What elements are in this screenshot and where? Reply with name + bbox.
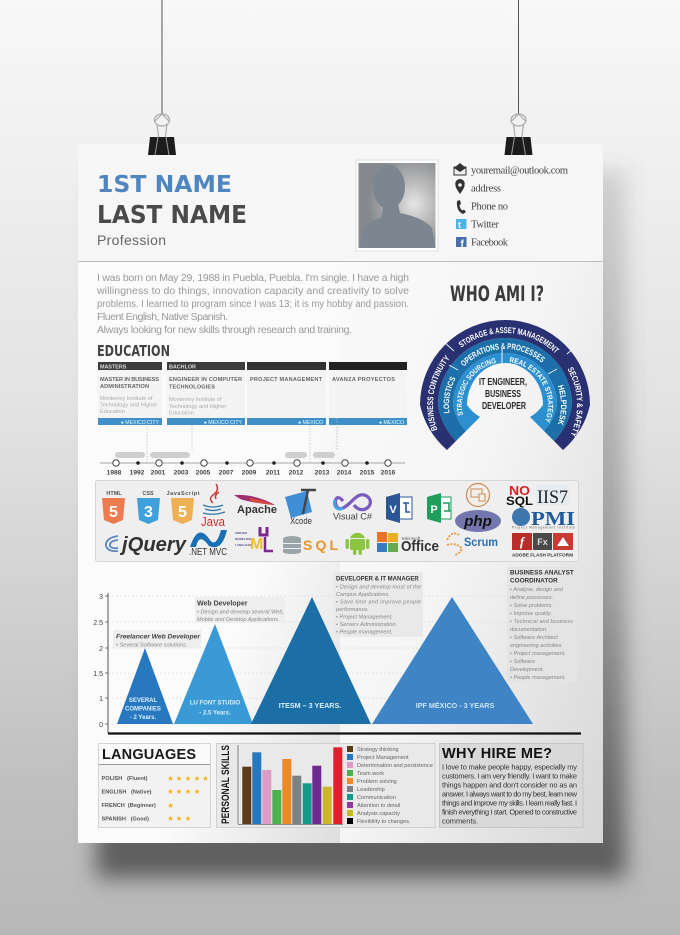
- icon: phone: [457, 200, 466, 214]
- logo: NoSQL: SQL: [506, 496, 533, 508]
- triangle: ipf mexico: IPF MÉXICO - 3 YEARS: [416, 701, 494, 710]
- card: bachelor: Education: [169, 410, 194, 416]
- language rows: SPANISH (Good): [102, 816, 149, 822]
- callout: developer and IT manager: • People management.: [336, 630, 393, 636]
- contact list: [454, 163, 568, 250]
- contact email: youremail@outlook.com: [471, 166, 568, 176]
- card: avanza proyectos: [329, 362, 407, 426]
- vertical heading: PERSONAL SKILLS: [220, 745, 232, 824]
- card: project management: [247, 362, 326, 426]
- card: masters: Technology and Higher: [100, 402, 157, 408]
- logo: Visio: [386, 493, 412, 523]
- logo: Microsoft Office: Microsoft: [402, 536, 421, 541]
- logo: NoSQL: NO: [509, 484, 530, 498]
- chart legend: Analysis capacity: [357, 811, 400, 817]
- biography text: problems. I learned to program since I was 13; it is my hobby and passion.: [97, 298, 409, 310]
- biography text: Fluent English, Native Spanish.: [97, 311, 228, 323]
- logo: UML: UNIFIED: [235, 531, 248, 535]
- heading: why hire me: WHY HIRE ME?: [442, 746, 552, 762]
- why hire me text: I love to make people happy, especially my: [442, 762, 577, 772]
- panel: languages: [98, 744, 210, 828]
- callout: web developer: • Design and develop several Web,: [197, 610, 284, 616]
- biography text: [96, 272, 409, 336]
- name heading: [97, 170, 247, 248]
- chart grid and axes: 1: [99, 696, 103, 703]
- logo: Visual C#: [333, 495, 373, 522]
- right hanging string and clip: [504, 0, 532, 155]
- callout: business analyst coordinator: define processes.: [510, 595, 553, 601]
- chart grid and axes: 2: [99, 646, 103, 653]
- why hire me text: answer. I always want to do my best, learn new: [442, 790, 578, 798]
- language star ratings: ★: [167, 774, 174, 783]
- timeline years: 1988: [107, 470, 122, 476]
- timeline years: 2005: [196, 470, 211, 476]
- triangle: several companies: - 2 Years.: [130, 715, 156, 721]
- callout: web developer: [195, 597, 285, 623]
- card: masters: MASTER IN BUSINESS: [100, 377, 159, 383]
- logo: IIS7: IIS7: [537, 487, 568, 508]
- icon: facebook: f: [460, 239, 464, 250]
- logo: UML: MODELING: [235, 537, 252, 541]
- logo: CSS3: CSS: [142, 491, 154, 497]
- logo: Apache: Apache: [237, 504, 277, 516]
- logo: devices circle: [466, 484, 490, 506]
- arc label: logistics: LOGISTICS: [444, 376, 456, 414]
- language star ratings: ★: [185, 814, 192, 823]
- logo: php: [455, 510, 501, 532]
- logo: .NET MVC: .NET MVC: [189, 547, 227, 558]
- language star ratings: [167, 774, 209, 823]
- logo: Project: P: [430, 504, 438, 516]
- logo: UML: M: [250, 536, 263, 553]
- card: bachelor: BACHLOR: [169, 364, 196, 370]
- timeline years: 2009: [242, 470, 257, 476]
- callout: freelancer web developer: [113, 630, 201, 648]
- heading: who am I: WHO AMI I?: [450, 282, 544, 306]
- arc label: business continuity: BUSINESS CONTINUITY: [427, 354, 449, 432]
- timeline years: 2007: [219, 470, 234, 476]
- why hire me text: finish everything I start. Opened to constructive: [442, 808, 577, 816]
- language star ratings: ★: [167, 814, 174, 823]
- logo: PMI: PMI: [531, 508, 575, 530]
- logo: Adobe Flash Platform: ADOBE FLASH PLATFORM: [512, 552, 573, 558]
- callout: business analyst coordinator: • Improve quality.: [510, 611, 552, 617]
- callout: developer and IT manager: • Design and develop most of the: [336, 584, 421, 590]
- logo: PMI: Project Management Institute: [512, 526, 575, 530]
- biography text: Always looking for new skills through research and training.: [97, 324, 352, 336]
- timeline years: 1992: [130, 470, 145, 476]
- logo: HTML5: HTML: [106, 491, 122, 497]
- icon: location pin: [455, 179, 465, 194]
- language star ratings: ★: [176, 787, 183, 796]
- card: masters: ● MEXICO CITY: [121, 420, 160, 426]
- card: masters: Monterrey Institute of: [100, 396, 153, 402]
- language star ratings: ★: [202, 774, 209, 783]
- chart legend: Leadership: [357, 787, 385, 793]
- card: bachelor: ● MEXICO CITY: [204, 420, 243, 426]
- logo: php: php: [463, 513, 492, 530]
- why hire me text: customers. I am very friendly. I want to make: [442, 772, 577, 780]
- name heading: LAST NAME: [97, 200, 247, 229]
- contact address: address: [471, 184, 501, 194]
- callout: freelancer web developer: • Several Software solutions.: [116, 642, 187, 648]
- radial skills diagram: [420, 320, 590, 450]
- timeline years: 2016: [381, 470, 396, 476]
- callout: business analyst coordinator: • Technical and business: [510, 619, 573, 625]
- biography text: I was born on May 29, 1988 in Puebla, Puebla. I'm single. I have a high: [97, 272, 409, 284]
- logo: Xcode: Xcode: [290, 516, 312, 526]
- triangle: lu font studio: [174, 624, 253, 724]
- card: masters: MASTERS: [100, 364, 127, 370]
- triangle: several companies: COMPANIES: [125, 706, 161, 712]
- callout: business analyst coordinator: • Software Architect: [510, 635, 558, 641]
- callout: business analyst coordinator: COORDINATOR: [510, 578, 558, 584]
- card: project management: ● MEXICO: [298, 420, 323, 426]
- chart legend: [347, 746, 433, 825]
- arc label: real estate strategy: REAL ESTATE STRATEGY: [510, 357, 554, 423]
- name heading: 1ST NAME: [97, 170, 232, 198]
- callout: business analyst coordinator: • Analyse, design and: [510, 587, 564, 593]
- why hire me text: comments.: [442, 816, 478, 826]
- triangle: lu font studio: LU FONT STUDIO: [190, 700, 240, 706]
- card: masters: [98, 362, 162, 426]
- logo: PMI: [512, 508, 575, 530]
- callout: business analyst coordinator: BUSINESS ANALYST: [510, 570, 574, 576]
- card: bachelor: Monterrey Institute of: [169, 397, 222, 403]
- icon: email: [454, 163, 466, 175]
- logo: jQuery: jQuery: [119, 534, 187, 556]
- timeline period pills: [115, 452, 335, 458]
- chart legend: Determination and persistence: [357, 763, 433, 769]
- callout: business analyst coordinator: • Solve problems.: [510, 603, 553, 609]
- logo: Apache: [234, 495, 277, 516]
- card: avanza proyectos: AVANZA PROYECTOS: [332, 377, 395, 383]
- logo: Scrum: [447, 533, 498, 555]
- language star ratings: ★: [185, 774, 192, 783]
- logo: Scrum: Scrum: [464, 535, 498, 549]
- language star ratings: ★: [176, 774, 183, 783]
- chart grid and axes: 3: [99, 594, 103, 601]
- callout: developer and IT manager: • Project Management.: [336, 614, 393, 620]
- callout: developer and IT manager: DEVELOPER & IT MANAGER: [336, 576, 419, 582]
- timeline years: [107, 470, 396, 476]
- center label: IT ENGINEER,: [479, 377, 527, 388]
- chart legend: Flexibility to changes.: [357, 819, 411, 825]
- logo: Android: [346, 533, 369, 555]
- triangle: ipf mexico: [372, 597, 533, 724]
- card: bachelor: Technology and Higher: [169, 404, 226, 410]
- logo: HTML5: [102, 491, 125, 524]
- language star ratings: ★: [194, 774, 201, 783]
- logo: Microsoft Office: [377, 532, 439, 555]
- logo: Adobe Flash Platform: [512, 533, 573, 558]
- heading: education: EDUCATION: [97, 342, 170, 360]
- panel: personal skills: [216, 744, 435, 828]
- card: avanza proyectos: ● MEXICO: [379, 420, 404, 426]
- bar chart: [238, 745, 343, 824]
- callout: business analyst coordinator: documentation.: [510, 627, 548, 633]
- icon: twitter: t: [458, 220, 461, 230]
- callout: business analyst coordinator: • Software: [510, 659, 535, 665]
- timeline years: 2001: [151, 470, 166, 476]
- left hanging string and clip: [148, 0, 176, 155]
- profile photo: [356, 160, 438, 251]
- inner light band: [453, 353, 557, 431]
- callout: developer and IT manager: • Servers Administration.: [336, 622, 397, 628]
- arc label: operations and processes: OPERATIONS & PROCESSES: [461, 343, 545, 366]
- card: masters: ADMINISTRATION: [100, 384, 149, 390]
- card: bachelor: TECHNOLOGIES: [169, 384, 215, 390]
- triangle: several companies: SEVERAL: [129, 698, 158, 704]
- callout: developer and IT manager: [334, 572, 423, 637]
- logo: UML: LANGUAGE: [235, 543, 252, 547]
- chart grid and axes: [93, 593, 581, 734]
- experience chart: [93, 567, 581, 734]
- chart legend: Problem solving: [357, 779, 397, 785]
- arc label: security and safety: SECURITY & SAFETY: [568, 367, 583, 438]
- timeline years: 2014: [337, 470, 352, 476]
- logo: SQL database: SQL: [303, 537, 338, 553]
- technology logos panel: [96, 480, 578, 562]
- poster shadow: [96, 170, 626, 878]
- center label: [479, 377, 527, 412]
- education timeline: [100, 417, 405, 476]
- card: project management: PROJECT MANAGEMENT: [250, 377, 323, 383]
- callout: business analyst coordinator: Development.: [510, 667, 544, 673]
- logo: Java: Java: [201, 514, 226, 529]
- contact phone: Phone no: [471, 202, 508, 212]
- language star ratings: ★: [176, 814, 183, 823]
- logo: JavaScript: 5: [178, 504, 187, 521]
- callout: web developer: Mobile and Desktop Applications.: [197, 617, 280, 623]
- heading: languages: LANGUAGES: [102, 747, 196, 763]
- triangle: itesm: ITESM – 3 YEARS.: [279, 701, 341, 710]
- chart legend: Team work: [357, 771, 384, 777]
- timeline years: 2011: [266, 470, 280, 476]
- chart legend: Project Management: [357, 755, 409, 761]
- callout: developer and IT manager: • Save time and improve people: [336, 600, 421, 606]
- chart grid and axes: 1.5: [93, 671, 103, 678]
- card: bachelor: ENGINEER IN COMPUTER: [169, 377, 242, 383]
- contact twitter: Twitter: [471, 220, 500, 230]
- chart legend: Strategy thinking: [357, 747, 399, 753]
- logo: Visual C#: Visual C#: [333, 512, 373, 522]
- callout: business analyst coordinator: [507, 567, 577, 682]
- timeline years: 2013: [315, 470, 330, 476]
- card: bachelor: [167, 362, 245, 426]
- logo: Adobe Flash Platform: Fx: [537, 537, 548, 547]
- education cards: [98, 362, 407, 426]
- language rows: ENGLISH (Native): [102, 790, 152, 796]
- logo: Xcode: [285, 490, 316, 526]
- arc label: storage and asset management: STORAGE & ASSET MANAGEMENT: [458, 327, 560, 353]
- biography text: willingness to do things, innovation capacity and creativity to solve: [96, 285, 409, 297]
- middle blue band: [438, 338, 572, 441]
- callout: business analyst coordinator: • People management.: [510, 675, 566, 681]
- logo: Microsoft Office: Office: [401, 538, 439, 555]
- language star ratings: ★: [185, 787, 192, 796]
- callout: developer and IT manager: performance.: [335, 607, 369, 613]
- card: masters: Education: [100, 409, 125, 415]
- logo: .NET MVC: [189, 530, 227, 558]
- logo: UML: [235, 527, 273, 553]
- outer navy band: [420, 320, 590, 450]
- chart grid and axes: 2.5: [93, 620, 103, 627]
- logo: CSS3: [137, 491, 160, 524]
- logo: JavaScript: JavaScript: [166, 491, 200, 497]
- chart legend: Attention to detail: [357, 803, 400, 809]
- language star ratings: ★: [167, 787, 174, 796]
- language rows: [102, 776, 156, 822]
- callout: business analyst coordinator: engineering activities.: [510, 643, 563, 649]
- logo: Project: [427, 493, 451, 523]
- logo: HTML5: 5: [109, 504, 118, 521]
- poster sheet: [78, 144, 603, 843]
- language star ratings: ★: [194, 787, 201, 796]
- logo: CSS3: 3: [144, 504, 153, 521]
- arc label: helpdesk: HELPDESK: [558, 384, 567, 426]
- center label: BUSINESS: [485, 389, 521, 400]
- callout: web developer: Web Developer: [197, 600, 248, 608]
- callout: developer and IT manager: Campus Applications.: [336, 592, 390, 598]
- triangle: lu font studio: - 2.5 Years.: [199, 710, 231, 716]
- callout: freelancer web developer: Freelancer Web Developer: [116, 634, 200, 640]
- why hire me text: [442, 762, 578, 826]
- triangle: itesm: [251, 597, 371, 724]
- logo: JavaScript: [166, 491, 200, 524]
- logo: Visio: V: [389, 504, 397, 516]
- name heading: Profession: [97, 232, 166, 248]
- logo: Adobe Flash Platform: f: [520, 534, 526, 549]
- logo: NoSQL: [506, 484, 533, 508]
- timeline years: 2003: [174, 470, 189, 476]
- panel: why hire me: [440, 744, 583, 828]
- chart grid and axes: 0: [99, 722, 103, 729]
- chart legend: Communication: [357, 795, 396, 801]
- callout: business analyst coordinator: • Project management.: [510, 651, 566, 657]
- language rows: FRENCH (Beginner): [102, 803, 156, 809]
- timeline years: 2012: [289, 470, 304, 476]
- logo: SQL database: [283, 536, 338, 554]
- why hire me text: things happen and don't consider no as an: [442, 780, 577, 790]
- timeline years: 2015: [360, 470, 375, 476]
- contact facebook: Facebook: [471, 238, 509, 248]
- why hire me text: things and improve my skills. I learn really fast. I: [442, 798, 577, 808]
- logo: Java: [201, 484, 226, 529]
- arc label: strategic sourcing: STRATEGIC SOURCING: [456, 358, 496, 416]
- language rows: POLISH (Fluent): [102, 776, 148, 782]
- center label: DEVELOPER: [482, 401, 526, 412]
- language star ratings: ★: [167, 801, 174, 810]
- triangle: several companies: [117, 648, 173, 724]
